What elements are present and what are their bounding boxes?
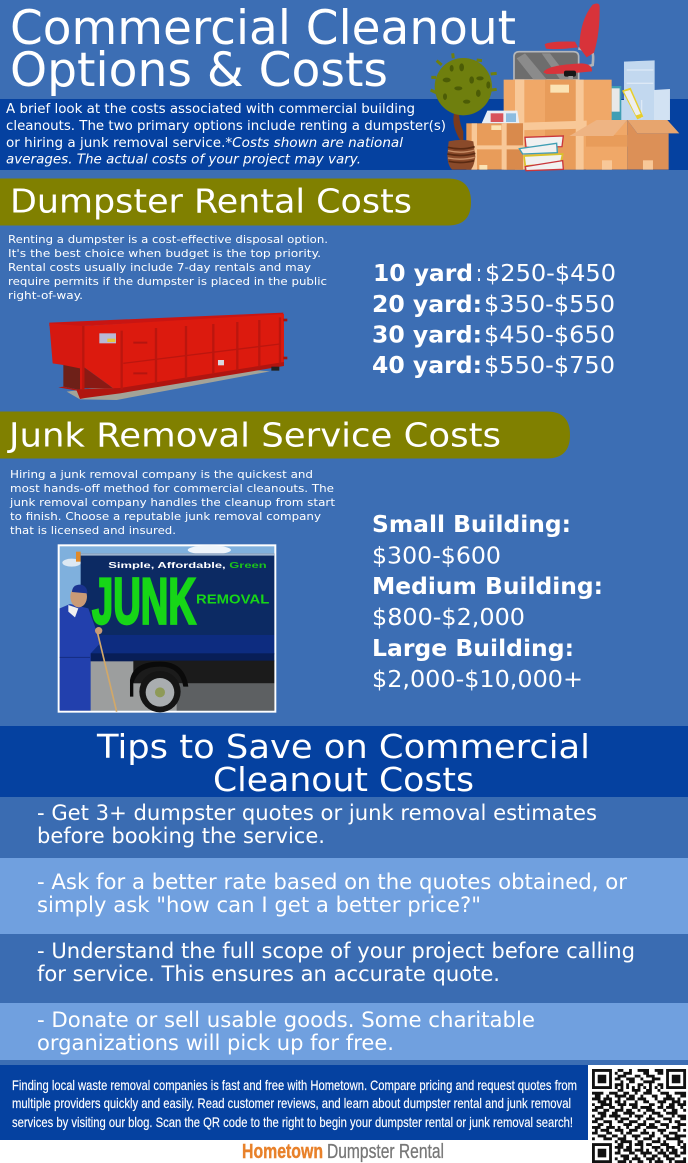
icon: stacked binders: [519, 136, 563, 171]
text: junk removal description: most hands-off method for commercial cleanouts. The: [10, 482, 334, 495]
tip 3: [0, 934, 688, 1003]
price list: dumpster sizes: [372, 261, 616, 379]
price list: building sizes: $300-$600: [372, 544, 501, 570]
icon: calendar: [482, 111, 519, 123]
text: junk removal description: Hiring a junk removal company is the quickest and: [10, 468, 313, 481]
heading: junk removal service costs: [0, 412, 570, 458]
heading: junk removal service costs: Junk Removal Service Costs: [7, 416, 501, 454]
intro band: A brief look at the costs associated with commercial building: [6, 102, 415, 117]
image: junk removal truck and worker: Simple, Affordable, Green: [108, 560, 267, 570]
text: dumpster description: right-of-way.: [8, 289, 83, 302]
price list: building sizes: [372, 512, 603, 693]
tip 1: before booking the service.: [37, 824, 325, 848]
title: [10, 1, 516, 98]
heading: dumpster rental costs: [0, 178, 471, 226]
QR code: [588, 1065, 688, 1163]
icon: small cardboard box: [466, 123, 523, 170]
text: dumpster description: Rental costs usually include 7-day rentals and may: [8, 261, 312, 274]
price list: building sizes: Small Building:: [372, 512, 571, 538]
heading: dumpster rental costs: Dumpster Rental Costs: [10, 182, 412, 220]
footer band: multiple providers quickly and easily. Read customer reviews, and learn about dumpster rental and junk removal: [12, 1095, 571, 1111]
image: junk removal truck and worker: REMOVAL: [196, 591, 269, 606]
intro band: [0, 99, 688, 170]
heading: tips to save: [0, 726, 688, 799]
tip 2: [0, 858, 688, 934]
icon: potted plant: [431, 53, 497, 170]
price list: dumpster sizes: $350-$550: [484, 292, 615, 318]
heading: tips to save: Tips to Save on Commercial: [96, 728, 590, 766]
title: Commercial Cleanout: [10, 1, 516, 56]
tip 1: [0, 797, 688, 858]
text: dumpster description: require permits if the dumpster is placed in the public: [8, 275, 327, 288]
tip 1: - Get 3+ dumpster quotes or junk removal estimates: [37, 801, 597, 825]
footer band: [0, 1065, 688, 1140]
icon: office chair: [514, 3, 600, 81]
price list: dumpster sizes: 20 yard:: [372, 292, 482, 318]
logo: hometown dumpster rental: Dumpster Rental: [327, 1141, 444, 1163]
text: dumpster description: [8, 233, 328, 302]
intro band: averages. The actual costs of your project may vary.: [6, 152, 361, 168]
tip 2: - Ask for a better rate based on the quotes obtained, or: [37, 870, 627, 894]
intro band: or hiring a junk removal service. *Costs shown are national: [6, 136, 403, 151]
tip 2: simply ask "how can I get a better price?": [37, 893, 481, 917]
price list: dumpster sizes: 30 yard:: [372, 322, 482, 348]
logo: hometown dumpster rental: Hometown: [242, 1141, 323, 1163]
intro band: cleanouts. The two primary options include renting a dumpster(s): [6, 119, 446, 134]
tip 3: for service. This ensures an accurate quote.: [37, 962, 500, 986]
price list: building sizes: Large Building:: [372, 636, 574, 662]
icon: binders: [588, 86, 643, 120]
icon: paper stacks: [620, 60, 670, 120]
text: dumpster description: It's the best choice when budget is the top priority.: [8, 247, 321, 260]
price list: building sizes: Medium Building:: [372, 574, 603, 600]
illustration: office boxes, chair and plant: [431, 3, 679, 171]
price list: dumpster sizes: 10 yard: [373, 261, 473, 287]
tip 4: - Donate or sell usable goods. Some charitable: [37, 1008, 535, 1032]
icon: open box: [569, 120, 679, 170]
image: junk removal truck and worker: JUNK: [92, 564, 196, 637]
text: junk removal description: that is licensed and insured.: [10, 524, 176, 537]
tip 4: [0, 1003, 688, 1060]
text: junk removal description: [9, 468, 336, 537]
icon: large cardboard box: [504, 80, 612, 170]
text: dumpster description: Renting a dumpster is a cost-effective disposal option.: [8, 233, 328, 246]
text: junk removal description: junk removal company handles the cleanup from start: [9, 496, 336, 509]
price list: building sizes: $800-$2,000: [372, 605, 525, 631]
logo: hometown dumpster rental: [242, 1141, 444, 1163]
price list: dumpster sizes: $550-$750: [484, 353, 615, 379]
title: Options & Costs: [10, 43, 388, 98]
tip 4: organizations will pick up for free.: [37, 1031, 394, 1055]
price list: building sizes: $2,000-$10,000+: [372, 667, 583, 693]
price list: dumpster sizes: $450-$650: [484, 322, 615, 348]
price list: dumpster sizes: :: [476, 261, 482, 287]
price list: dumpster sizes: 40 yard:: [372, 353, 482, 379]
price list: dumpster sizes: $250-$450: [485, 261, 616, 287]
text: junk removal description: to finish. Choose a reputable junk removal company: [10, 510, 322, 523]
heading: tips to save: Cleanout Costs: [213, 761, 474, 799]
image: red dumpster: [49, 313, 287, 400]
image: junk removal truck and worker: [58, 544, 276, 713]
tip 3: - Understand the full scope of your project before calling: [37, 939, 635, 963]
